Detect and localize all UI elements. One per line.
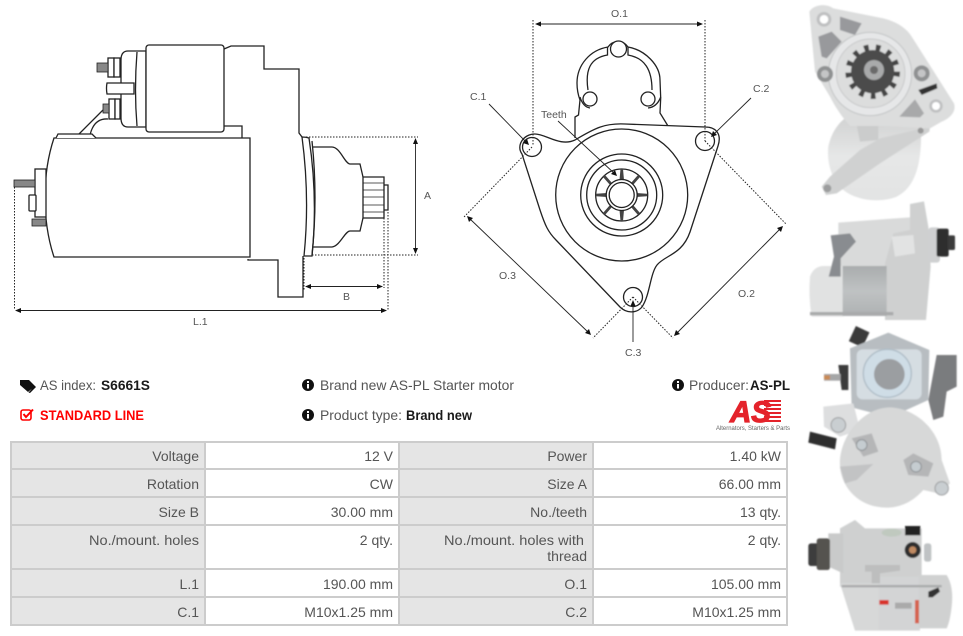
flange plate xyxy=(520,124,719,312)
product type line xyxy=(302,407,472,423)
dimension O.1: O.1 xyxy=(611,8,628,20)
AS index line: AS index: xyxy=(40,377,96,393)
row: C.1 and C.2: C.2 xyxy=(565,604,587,620)
label Teeth xyxy=(541,109,617,176)
product photo: side view xyxy=(809,201,955,320)
row: size B and teeth: No./teeth xyxy=(530,504,587,520)
dimension O.2: O.2 xyxy=(738,288,755,300)
row: rotation and size A: CW xyxy=(370,476,394,492)
logo: AS-PL xyxy=(716,396,791,432)
dimension B: B xyxy=(343,291,350,303)
row: voltage and power: 1.40 kW xyxy=(730,448,782,464)
AS index line: S6661S xyxy=(101,377,150,393)
row: L.1 and O.1: 105.00 mm xyxy=(711,576,781,592)
row: size B and teeth: 13 qty. xyxy=(740,504,781,520)
motor body xyxy=(14,110,250,257)
mounting bracket xyxy=(575,41,668,138)
table backgrounds xyxy=(11,441,593,626)
row: mounting holes: 2 qty. xyxy=(748,532,781,548)
icon: info xyxy=(672,379,684,391)
icon: check square xyxy=(21,410,33,420)
solenoid xyxy=(97,45,224,132)
product photo: rear view xyxy=(808,326,957,508)
AS index line xyxy=(20,377,150,393)
product photo: drive end xyxy=(809,5,955,200)
mounting holes xyxy=(522,132,714,306)
row: rotation and size A xyxy=(147,476,781,492)
standard line badge: STANDARD LINE xyxy=(40,407,144,423)
row: mounting holes: No./mount. holes with xyxy=(444,532,584,548)
producer line: Producer: xyxy=(689,377,749,393)
label C.1 xyxy=(470,91,529,145)
row: L.1 and O.1: L.1 xyxy=(180,576,199,592)
row: size B and teeth xyxy=(159,504,781,520)
dimension O.2 xyxy=(633,141,786,338)
producer line xyxy=(672,377,790,393)
icon: info xyxy=(302,409,314,421)
row: mounting holes: No./mount. holes xyxy=(89,532,199,548)
product type line: Product type: xyxy=(320,407,402,423)
label Teeth: Teeth xyxy=(541,109,567,121)
row: size B and teeth: Size B xyxy=(159,504,199,520)
row: L.1 and O.1: 190.00 mm xyxy=(323,576,393,592)
label C.3: C.3 xyxy=(625,347,642,359)
row: L.1 and O.1 xyxy=(180,576,781,592)
row: C.1 and C.2: M10x1.25 mm xyxy=(304,604,393,620)
row: size B and teeth: 30.00 mm xyxy=(331,504,393,520)
product description line: Brand new AS-PL Starter motor xyxy=(320,377,514,393)
product type line: Brand new xyxy=(406,407,472,423)
dimension O.3 xyxy=(464,147,633,338)
logo: AS-PL: AS xyxy=(729,396,771,429)
concentric rings and pinion teeth xyxy=(556,129,688,261)
row: C.1 and C.2 xyxy=(177,604,781,620)
label C.3 xyxy=(625,300,642,359)
label C.2: C.2 xyxy=(753,83,770,95)
product photo: label side xyxy=(808,520,952,631)
row: C.1 and C.2: M10x1.25 mm xyxy=(692,604,781,620)
row: rotation and size A: Size A xyxy=(547,476,588,492)
front view technical drawing xyxy=(464,8,786,359)
label C.2 xyxy=(711,83,770,137)
side view technical drawing xyxy=(14,45,431,328)
dimension L.1: L.1 xyxy=(193,316,208,328)
icon: info xyxy=(302,379,314,391)
row: rotation and size A: Rotation xyxy=(147,476,199,492)
logo: AS-PL: Alternators, Starters & Parts xyxy=(716,425,791,432)
dimension A xyxy=(306,137,431,255)
icon: tags xyxy=(20,380,36,393)
row: voltage and power xyxy=(152,448,782,464)
drive nose and pinion xyxy=(302,137,388,256)
drive housing xyxy=(224,46,303,297)
producer line: AS-PL xyxy=(750,377,790,393)
row: C.1 and C.2: C.1 xyxy=(177,604,199,620)
row: voltage and power: Power xyxy=(547,448,587,464)
row: L.1 and O.1: O.1 xyxy=(564,576,587,592)
row: voltage and power: 12 V xyxy=(364,448,394,464)
dimension L.1 xyxy=(14,187,388,328)
row: mounting holes: 2 qty. xyxy=(360,532,393,548)
dimension O.1 xyxy=(533,8,705,146)
dimension O.3: O.3 xyxy=(499,270,516,282)
row: voltage and power: Voltage xyxy=(152,448,199,464)
specifications table xyxy=(11,441,787,626)
row: mounting holes xyxy=(89,532,781,564)
row: mounting holes: thread xyxy=(547,548,587,564)
label C.1: C.1 xyxy=(470,91,486,103)
dimension A: A xyxy=(424,190,431,202)
row: rotation and size A: 66.00 mm xyxy=(719,476,781,492)
dimension B xyxy=(304,218,384,303)
